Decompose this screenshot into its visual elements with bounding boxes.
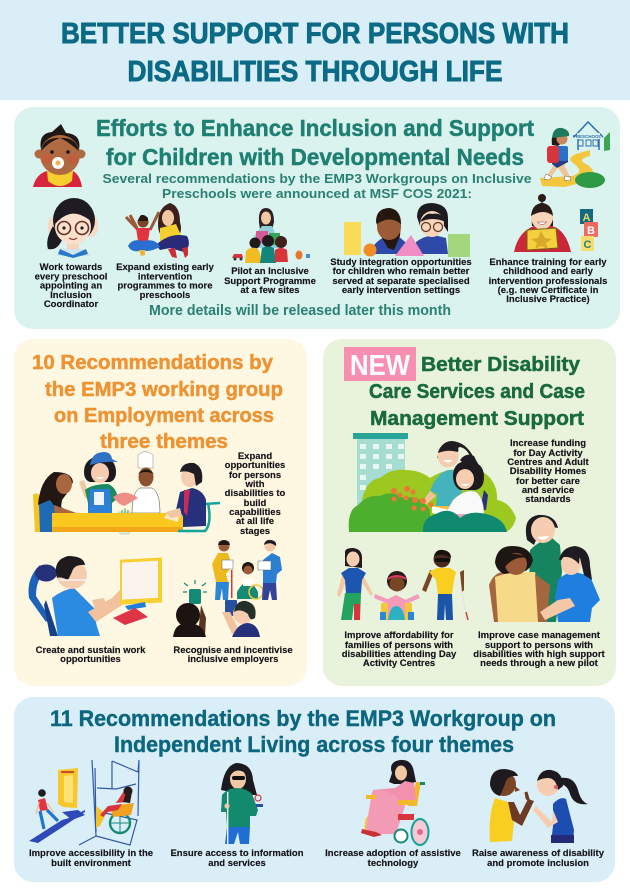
text: access to information: [170, 848, 304, 869]
text: expand opportunities: capabilities: [229, 507, 281, 518]
text: improve affordability: Activity Centres: [363, 658, 435, 669]
icon: child walking to preschool: [540, 122, 610, 188]
text: expand opportunities: Expand: [238, 451, 272, 462]
text: improve affordability: families of persons with: [345, 640, 453, 651]
title banner: DISABILITIES THROUGH LIFE: [128, 56, 502, 88]
text: accessibility: built environment: [51, 858, 132, 869]
text: accessibility: Improve accessibility in the: [29, 848, 153, 859]
item: improve case management: [473, 515, 606, 669]
heading: better disability care services: [369, 353, 585, 430]
text: enhance training: intervention professionals: [489, 276, 607, 287]
text: study integration opportunities: [330, 257, 472, 296]
text: improve case management: support to persons with: [485, 640, 593, 651]
icon: two children with shapes: [344, 203, 470, 257]
intro text: Preschools were announced at MSF COS 2021:: [162, 186, 472, 201]
icon: girl holding star board and ABC blocks: C: [584, 239, 592, 251]
text: improve affordability: [342, 630, 457, 669]
text: inclusion coordinator: Coordinator: [44, 299, 98, 310]
text: enhance training: (e.g. new Certificate in: [498, 285, 599, 296]
text: assistive technology: technology: [368, 858, 419, 869]
text: expand early intervention: programmes to more: [117, 280, 213, 292]
panel: employment: [14, 339, 307, 686]
text: improve case management: [473, 630, 606, 669]
badge: new: NEW: [350, 350, 411, 382]
item: improve affordability: [337, 548, 468, 669]
heading: better disability care services: Management Support: [370, 407, 584, 430]
text: enhance training: Inclusive Practice): [506, 294, 590, 305]
icon: girl holding star board and ABC blocks: A: [583, 212, 591, 224]
icon: child walking to preschool: PRESCHOOL: [573, 134, 601, 139]
heading: efforts to enhance inclusion: Efforts to Enhance Inclusion and Support: [96, 115, 534, 141]
text: increase funding: Disability Homes: [510, 466, 586, 477]
text: expand early intervention: intervention: [138, 272, 192, 282]
icon: woman with cane and phone: [221, 763, 263, 844]
icon: girl holding star board and ABC blocks: [514, 194, 598, 252]
text: expand opportunities: [225, 451, 286, 537]
panel: children with developmental needs: [14, 107, 620, 329]
item: increase funding: [349, 433, 590, 532]
text: inclusion coordinator: [35, 262, 107, 310]
item: access to information: [170, 763, 304, 869]
text: create and sustain work: [36, 645, 146, 665]
text: raise awareness: Raise awareness of disability: [472, 848, 605, 859]
icon: girl holding star board and ABC blocks: B: [587, 225, 595, 237]
text: improve affordability: Improve affordability for: [344, 630, 454, 641]
text: increase funding: for Day Activity: [513, 448, 583, 459]
text: improve case management: needs through a new pilot: [480, 658, 599, 669]
text: inclusion coordinator: Work towards: [40, 262, 102, 273]
icon: three children holding hands: [337, 548, 468, 620]
text: assistive technology: Increase adoption of assistive: [325, 848, 461, 859]
text: inclusive support programme: at a few sites: [240, 285, 300, 296]
heading: efforts to enhance inclusion: [96, 115, 534, 170]
text: improve case management: disabilities with high support: [473, 649, 606, 660]
text: expand opportunities: at all life: [236, 516, 274, 527]
heading: efforts to enhance inclusion: for Children with Developmental Needs: [106, 144, 524, 170]
icon: woman with glasses: [47, 198, 98, 258]
icon: colleagues around a table: [33, 452, 220, 534]
text: expand early intervention: [116, 262, 215, 301]
icon: lift, tactile path and wheelchair user: [29, 760, 139, 845]
icon: man using mouth stick at computer: [28, 556, 162, 636]
text: access to information: and services: [208, 858, 266, 869]
heading: 10 recommendations on employment: the EMP3 working group: [45, 378, 283, 401]
item: accessibility: [29, 760, 153, 869]
item: inclusion coordinator: [35, 198, 107, 310]
text: assistive technology: [325, 848, 461, 869]
text: recognise employers: Recognise and incentivise: [173, 645, 293, 656]
icon: woman reading to children with toys: [232, 208, 310, 263]
text: improve case management: Improve case management: [478, 630, 601, 641]
text: inclusion coordinator: every preschool: [35, 272, 107, 282]
item: study integration opportunities: [330, 203, 472, 296]
heading: 11 recommendations on independent living: [50, 706, 556, 757]
heading: 10 recommendations on employment: [32, 351, 283, 453]
heading: 11 recommendations on independent living: 11 Recommendations by the EMP3 Workgroup on: [50, 706, 556, 731]
icon: care staff supporting a woman: [489, 515, 600, 622]
text: inclusive support programme: Support Programme: [224, 276, 316, 287]
text: increase funding: Increase funding: [510, 438, 586, 449]
text: recognise employers: inclusive employers: [188, 654, 278, 665]
item: inclusive support programme: [224, 208, 316, 296]
icon: group of employees and award: [173, 540, 282, 637]
text: expand opportunities: opportunities: [225, 460, 285, 471]
text: enhance training: childhood and early: [503, 266, 594, 277]
text: raise awareness: and promote inclusion: [487, 858, 589, 869]
text: expand opportunities: build: [244, 498, 267, 509]
panel: independent living: [14, 697, 615, 882]
text: increase funding: and service: [522, 485, 574, 496]
text: inclusive support programme: Pilot an Inclusive: [231, 266, 309, 277]
icon: woman and child playing: [126, 203, 189, 258]
icon: woman and wheelchair user in garden: [349, 433, 516, 532]
text: raise awareness: [472, 848, 605, 869]
item: assistive technology: [325, 760, 461, 869]
text: create and sustain work: opportunities: [60, 654, 121, 665]
item: raise awareness: [472, 769, 605, 869]
text: access to information: Ensure access to information: [170, 848, 304, 859]
item: expand early intervention: [116, 203, 215, 301]
text: inclusion coordinator: appointing an: [40, 280, 102, 292]
item: enhance training: [489, 194, 607, 305]
text: improve affordability: disabilities attending Day: [342, 649, 457, 660]
text: study integration opportunities: served at separate specialised: [332, 276, 470, 287]
icon: woman in wheelchair: [361, 760, 428, 845]
text: study integration opportunities: for children who remain better: [333, 266, 470, 277]
text: study integration opportunities: Study integration opportunities: [330, 257, 472, 268]
text: increase funding: standards: [525, 494, 571, 505]
text: enhance training: [489, 257, 607, 305]
heading: 11 recommendations on independent living: Independent Living across four themes: [114, 732, 514, 757]
text: increase funding: Centres and Adult: [507, 457, 590, 468]
text: expand early intervention: preschools: [140, 290, 190, 301]
text: study integration opportunities: early intervention settings: [342, 285, 460, 296]
icon: two children communicating: [490, 769, 588, 843]
text: enhance training: Enhance training for early: [489, 257, 607, 268]
title banner: [0, 0, 630, 100]
item: expand opportunities: [33, 451, 286, 537]
heading: 10 recommendations on employment: on Employment across: [54, 404, 274, 427]
item: create and sustain work: [28, 556, 162, 665]
heading: 10 recommendations on employment: 10 Recommendations by: [32, 351, 274, 374]
text: expand opportunities: for persons: [229, 470, 281, 481]
heading: better disability care services: Care Services and Case: [369, 380, 585, 403]
text: increase funding: for better care: [516, 476, 580, 487]
title banner: BETTER SUPPORT FOR PERSONS WITH: [61, 18, 569, 50]
text: inclusion coordinator: Inclusion: [50, 290, 92, 301]
text: create and sustain work: Create and sustain work: [36, 645, 146, 656]
text: recognise employers: [173, 645, 293, 665]
text: more details: More details will be released later this month: [149, 303, 451, 319]
text: inclusive support programme: [224, 266, 316, 296]
panel: disability care services: [323, 339, 616, 686]
text: increase funding: [507, 438, 590, 505]
text: expand early intervention: Expand existing early: [116, 262, 215, 273]
heading: better disability care services: Better Disability: [421, 353, 581, 376]
intro text: [102, 171, 532, 201]
text: accessibility: [29, 848, 153, 869]
icon: baby with pacifier: [33, 124, 86, 187]
item: recognise employers: [173, 540, 293, 665]
heading: 10 recommendations on employment: three themes: [100, 430, 228, 453]
intro text: Several recommendations by the EMP3 Workgroups on Inclusive: [102, 171, 532, 186]
text: expand opportunities: disabilities to: [225, 488, 286, 499]
text: expand opportunities: stages: [240, 526, 270, 537]
text: expand opportunities: with: [244, 479, 265, 490]
